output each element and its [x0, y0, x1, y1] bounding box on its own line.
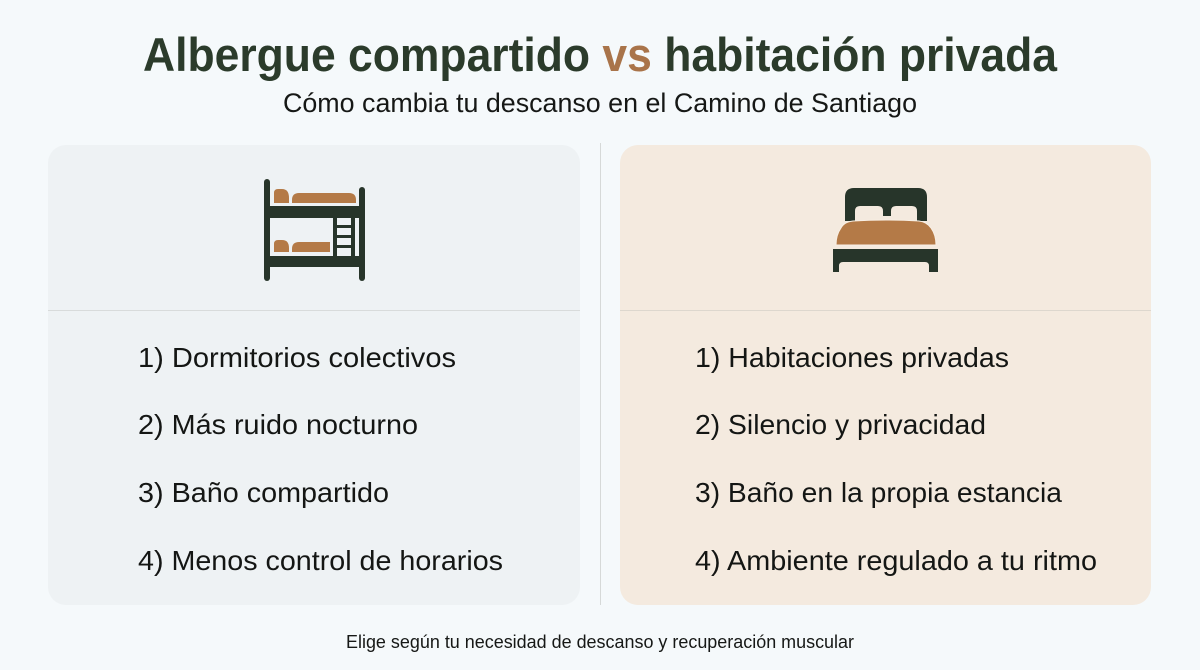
list: albergue: 1) Dormitorios colectivos	[138, 342, 456, 373]
list: albergue	[138, 342, 503, 576]
panel: albergue compartido	[48, 145, 580, 605]
list: habitación: 4) Ambiente regulado a tu ritmo	[695, 545, 1097, 576]
list: albergue: 2) Más ruido nocturno	[138, 409, 418, 440]
list: albergue: 3) Baño compartido	[138, 477, 389, 508]
list: habitación: 1) Habitaciones privadas	[695, 342, 1009, 373]
list: habitación	[695, 342, 1097, 576]
footer note: Elige según tu necesidad de descanso y recuperación muscular	[346, 632, 854, 652]
icon: bunk bed	[264, 179, 365, 281]
list: habitación: 2) Silencio y privacidad	[695, 409, 986, 440]
list: albergue: 4) Menos control de horarios	[138, 545, 503, 576]
title: Albergue compartido vs habitación privada	[143, 28, 1058, 81]
icon: double bed	[833, 188, 938, 272]
center divider	[600, 143, 602, 605]
panel: habitación privada	[620, 145, 1151, 605]
list: habitación: 3) Baño en la propia estancia	[695, 477, 1062, 508]
subtitle: Cómo cambia tu descanso en el Camino de Santiago	[283, 88, 917, 118]
